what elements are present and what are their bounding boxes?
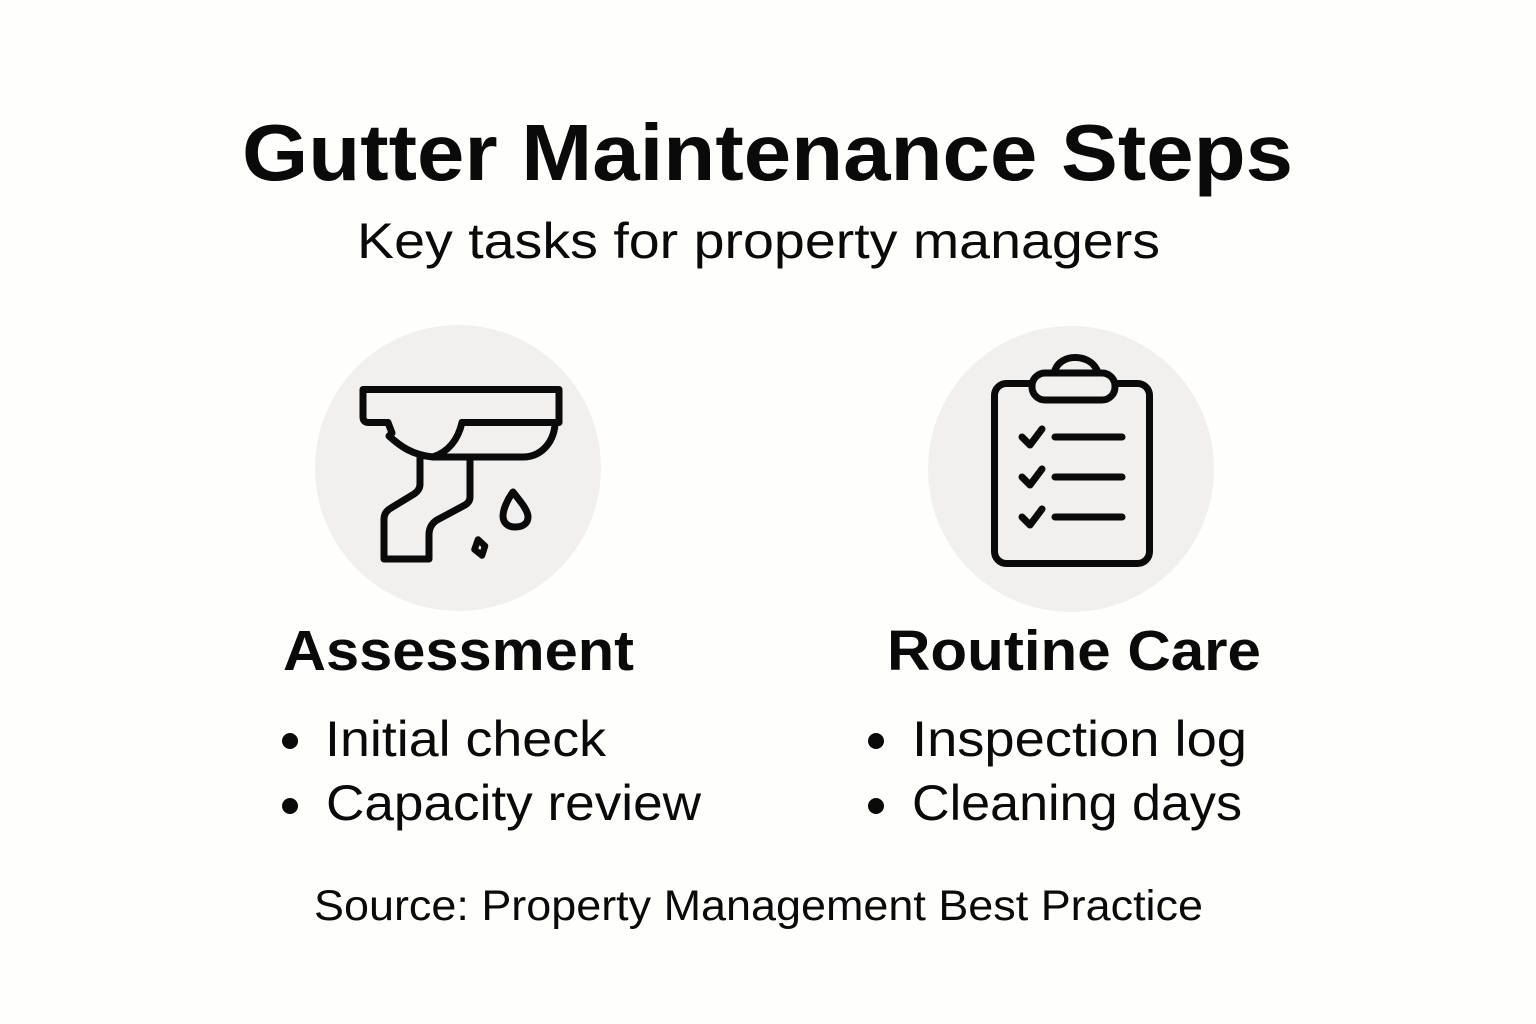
- icon: gutter with downspout and water drops: [315, 325, 601, 611]
- subtitle: Key tasks for property managers: [357, 213, 1160, 269]
- heading: assessment: Assessment: [283, 619, 634, 683]
- source note: Source: Property Management Best Practice: [314, 882, 1203, 930]
- panel: routine care: [868, 326, 1261, 831]
- title: Gutter Maintenance Steps: [242, 108, 1293, 197]
- list item: cleaning days: Cleaning days: [912, 775, 1242, 831]
- list item: capacity review: Capacity review: [326, 775, 702, 831]
- icon: clipboard checklist: [928, 326, 1214, 612]
- heading: routine care: Routine Care: [887, 619, 1261, 683]
- list item: initial check: Initial check: [325, 711, 607, 767]
- list item: inspection log: Inspection log: [912, 711, 1247, 767]
- panel: assessment: [282, 325, 702, 831]
